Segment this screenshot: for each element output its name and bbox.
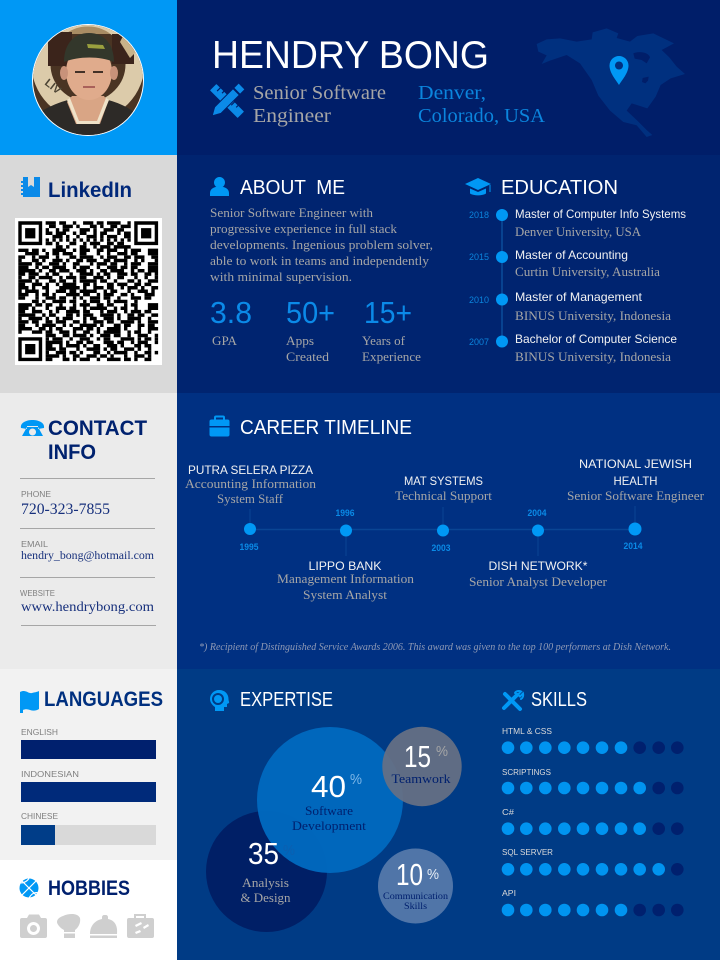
stat: apps created bbox=[286, 295, 335, 364]
about me paragraph: Senior Software Engineer with bbox=[210, 205, 374, 220]
stat: years of experience: Years of bbox=[362, 333, 406, 348]
entry: 2018: 2018 bbox=[469, 210, 489, 220]
job: Putra Selera Pizza: 1995 bbox=[240, 542, 258, 552]
language: English: ENGLISH bbox=[21, 728, 58, 737]
phone: 720-323-7855 bbox=[21, 501, 110, 518]
skills heading: SKILLS bbox=[531, 688, 587, 711]
language: English bbox=[21, 728, 156, 759]
job: MAT Systems: Technical Support bbox=[395, 488, 492, 503]
icon: food cloche bbox=[90, 915, 117, 938]
entry: 2007 bbox=[469, 332, 677, 364]
job: Dish Network: 2004 bbox=[528, 508, 546, 518]
bubble: teamwork bbox=[382, 727, 462, 806]
bubble: communication skills: 10 bbox=[396, 857, 423, 892]
icon: head with gear bbox=[210, 690, 229, 711]
entry: 2007: Bachelor of Computer Science bbox=[515, 332, 677, 346]
contact heading bbox=[48, 417, 147, 464]
panel: hobbies bbox=[0, 860, 177, 960]
panel: education bbox=[440, 155, 720, 393]
skill: scriptings, 8 of 10: SCRIPTINGS bbox=[502, 768, 551, 777]
job title bbox=[253, 83, 386, 127]
job: Lippo Bank: LIPPO BANK bbox=[308, 559, 382, 573]
label: analysis and design bbox=[240, 836, 295, 905]
bubble: analysis and design bbox=[206, 811, 327, 932]
portrait photo bbox=[32, 24, 144, 136]
job: Dish Network bbox=[469, 508, 608, 589]
bubble: communication skills bbox=[378, 848, 453, 924]
about me paragraph bbox=[210, 205, 433, 284]
bubble: software development: Software bbox=[305, 803, 353, 818]
job title: Engineer bbox=[253, 106, 332, 127]
entry: 2010: BINUS University, Indonesia bbox=[515, 308, 671, 323]
languages heading: LANGUAGES bbox=[44, 688, 163, 711]
job: Dish Network: Senior Analyst Developer bbox=[469, 574, 608, 589]
icon: crossed tools bbox=[504, 691, 523, 709]
entry: 2015: 2015 bbox=[469, 252, 489, 262]
entry: 2007: 2007 bbox=[469, 337, 489, 347]
panel: expertise bbox=[177, 669, 480, 960]
job: Lippo Bank: 1996 bbox=[336, 508, 354, 518]
skill: API, 7 of 10: API bbox=[502, 889, 516, 898]
job: Putra Selera Pizza bbox=[185, 463, 317, 552]
icon: flag bbox=[20, 691, 39, 713]
map of North America with pin bbox=[537, 28, 685, 137]
about me heading: ABOUT ME bbox=[240, 176, 345, 199]
bubble: teamwork: % bbox=[436, 743, 448, 760]
icon: basketball bbox=[19, 878, 39, 898]
about me paragraph: developments. Ingenious problem solver, bbox=[210, 237, 433, 252]
bubble: software development bbox=[257, 727, 403, 873]
job: MAT Systems: 2003 bbox=[432, 543, 450, 553]
name heading: HENDRY BONG bbox=[212, 34, 489, 77]
bubble: software development: 40 bbox=[311, 769, 346, 804]
phone: PHONE bbox=[21, 490, 51, 499]
entry: 2018: Master of Computer Info Systems bbox=[515, 207, 686, 221]
skill: SQL server, 9 of 10 bbox=[502, 848, 684, 876]
QR code bbox=[15, 218, 162, 365]
contact heading: INFO bbox=[48, 441, 96, 464]
bubble: software development: Development bbox=[292, 818, 366, 833]
job: National Jewish Health bbox=[567, 457, 705, 551]
panel: languages bbox=[0, 669, 177, 860]
about me paragraph: progressive experience in full stack bbox=[210, 221, 397, 236]
LinkedIn heading: LinkedIn bbox=[48, 179, 132, 202]
skill: HTML and CSS, 7 of 10 bbox=[502, 727, 684, 754]
panel: about me bbox=[177, 155, 440, 393]
icon: telephone bbox=[21, 420, 44, 436]
career heading: CAREER TIMELINE bbox=[240, 416, 412, 439]
job: Putra Selera Pizza: Accounting Information bbox=[185, 476, 317, 491]
entry: 2015 bbox=[469, 248, 660, 279]
label: analysis and design: % bbox=[283, 842, 295, 859]
job: Putra Selera Pizza: PUTRA SELERA PIZZA bbox=[188, 463, 313, 477]
stat: GPA bbox=[210, 295, 252, 348]
job: MAT Systems: MAT SYSTEMS bbox=[404, 474, 483, 488]
bubble: teamwork: Teamwork bbox=[392, 771, 451, 786]
email bbox=[21, 540, 155, 562]
website bbox=[20, 589, 155, 614]
location: Colorado, USA bbox=[418, 106, 545, 127]
panel: contact info bbox=[0, 393, 177, 669]
stat: years of experience: 15+ bbox=[364, 295, 412, 330]
panel: career timeline bbox=[177, 393, 720, 669]
job: MAT Systems bbox=[395, 474, 492, 553]
entry: 2010: Master of Management bbox=[515, 290, 643, 304]
stat: apps created: Created bbox=[286, 349, 330, 364]
label: analysis and design: 35 bbox=[248, 836, 279, 871]
bubble: communication skills: Communication bbox=[383, 891, 449, 901]
stat: GPA: 3.8 bbox=[210, 295, 252, 330]
icon: boxing glove bbox=[57, 914, 80, 938]
website: WEBSITE bbox=[20, 589, 55, 598]
website: www.hendrybong.com bbox=[21, 599, 155, 614]
job: National Jewish Health: NATIONAL JEWISH bbox=[579, 457, 692, 471]
entry: 2015: Curtin University, Australia bbox=[515, 264, 660, 279]
language: Indonesian: INDONESIAN bbox=[21, 770, 79, 779]
job: Lippo Bank: System Analyst bbox=[303, 587, 387, 602]
stat: apps created: 50+ bbox=[286, 295, 335, 330]
entry: 2007: BINUS University, Indonesia bbox=[515, 349, 671, 364]
phone bbox=[21, 490, 110, 518]
about me paragraph: with minimal supervision. bbox=[210, 269, 352, 284]
panel: LinkedIn bbox=[0, 155, 177, 393]
contact heading: CONTACT bbox=[48, 417, 147, 440]
skill: API, 7 of 10 bbox=[502, 889, 684, 916]
skill: C#, 8 of 10 bbox=[502, 808, 684, 835]
language: Chinese bbox=[21, 812, 156, 845]
email: hendry_bong@hotmail.com bbox=[21, 548, 155, 562]
panel: photo block bbox=[0, 0, 177, 155]
expertise heading: EXPERTISE bbox=[240, 688, 333, 711]
job: Lippo Bank: Management Information bbox=[277, 571, 415, 586]
icon: suitcase bbox=[127, 914, 154, 938]
icon: ruler and pencil bbox=[209, 83, 245, 119]
entry: 2018 bbox=[469, 207, 686, 239]
timeline axis bbox=[244, 506, 642, 556]
entry: 2010 bbox=[469, 290, 671, 323]
icon: location pin bbox=[610, 56, 628, 85]
footnote: *) Recipient of Distinguished Service Awards 2006. This award was given to the top 100 performers at Dish Network. bbox=[199, 642, 671, 653]
stat: GPA: GPA bbox=[212, 333, 238, 348]
email: EMAIL bbox=[21, 540, 49, 549]
bubble: communication skills: % bbox=[427, 866, 439, 883]
job: Putra Selera Pizza: System Staff bbox=[217, 491, 284, 506]
bubble: teamwork: 15 bbox=[404, 739, 431, 774]
job: National Jewish Health: 2014 bbox=[624, 541, 642, 551]
skill: C#, 8 of 10: C# bbox=[502, 808, 515, 817]
education timeline bbox=[469, 207, 686, 364]
icon: graduation cap bbox=[465, 178, 491, 195]
panel: skills bbox=[480, 669, 720, 960]
bubble: software development: % bbox=[350, 771, 362, 788]
portrait photo: LIV bbox=[42, 77, 64, 97]
label: analysis and design: & Design bbox=[240, 890, 291, 905]
hobbies heading: HOBBIES bbox=[48, 877, 130, 900]
education heading: EDUCATION bbox=[501, 176, 618, 199]
panel: header bbox=[177, 0, 720, 155]
entry: 2018: Denver University, USA bbox=[515, 224, 642, 239]
stat: years of experience: Experience bbox=[362, 349, 421, 364]
job: Lippo Bank bbox=[277, 508, 415, 602]
job: Dish Network: DISH NETWORK* bbox=[488, 559, 588, 573]
entry: 2015: Master of Accounting bbox=[515, 248, 628, 262]
label: analysis and design: Analysis bbox=[242, 875, 289, 890]
bubble: communication skills: Skills bbox=[404, 901, 428, 911]
icon: person bbox=[210, 177, 229, 196]
language: Chinese: CHINESE bbox=[21, 812, 58, 821]
job title: Senior Software bbox=[253, 83, 386, 104]
icon: notebook bbox=[21, 177, 40, 197]
skill: SQL server, 9 of 10: SQL SERVER bbox=[502, 848, 553, 857]
entry: 2010: 2010 bbox=[469, 295, 489, 305]
skill: scriptings, 8 of 10 bbox=[502, 768, 684, 794]
job: National Jewish Health: Senior Software Engineer bbox=[567, 488, 705, 503]
icon: briefcase bbox=[210, 416, 230, 436]
language: Indonesian bbox=[21, 770, 156, 802]
stat: apps created: Apps bbox=[286, 333, 314, 348]
location bbox=[418, 83, 545, 127]
skill: HTML and CSS, 7 of 10: HTML & CSS bbox=[502, 727, 552, 736]
about me paragraph: able to work in teams and independently bbox=[210, 253, 430, 268]
job: National Jewish Health: HEALTH bbox=[614, 474, 658, 488]
stat: years of experience bbox=[362, 295, 421, 364]
icon: camera bbox=[20, 914, 47, 938]
location: Denver, bbox=[418, 83, 486, 104]
